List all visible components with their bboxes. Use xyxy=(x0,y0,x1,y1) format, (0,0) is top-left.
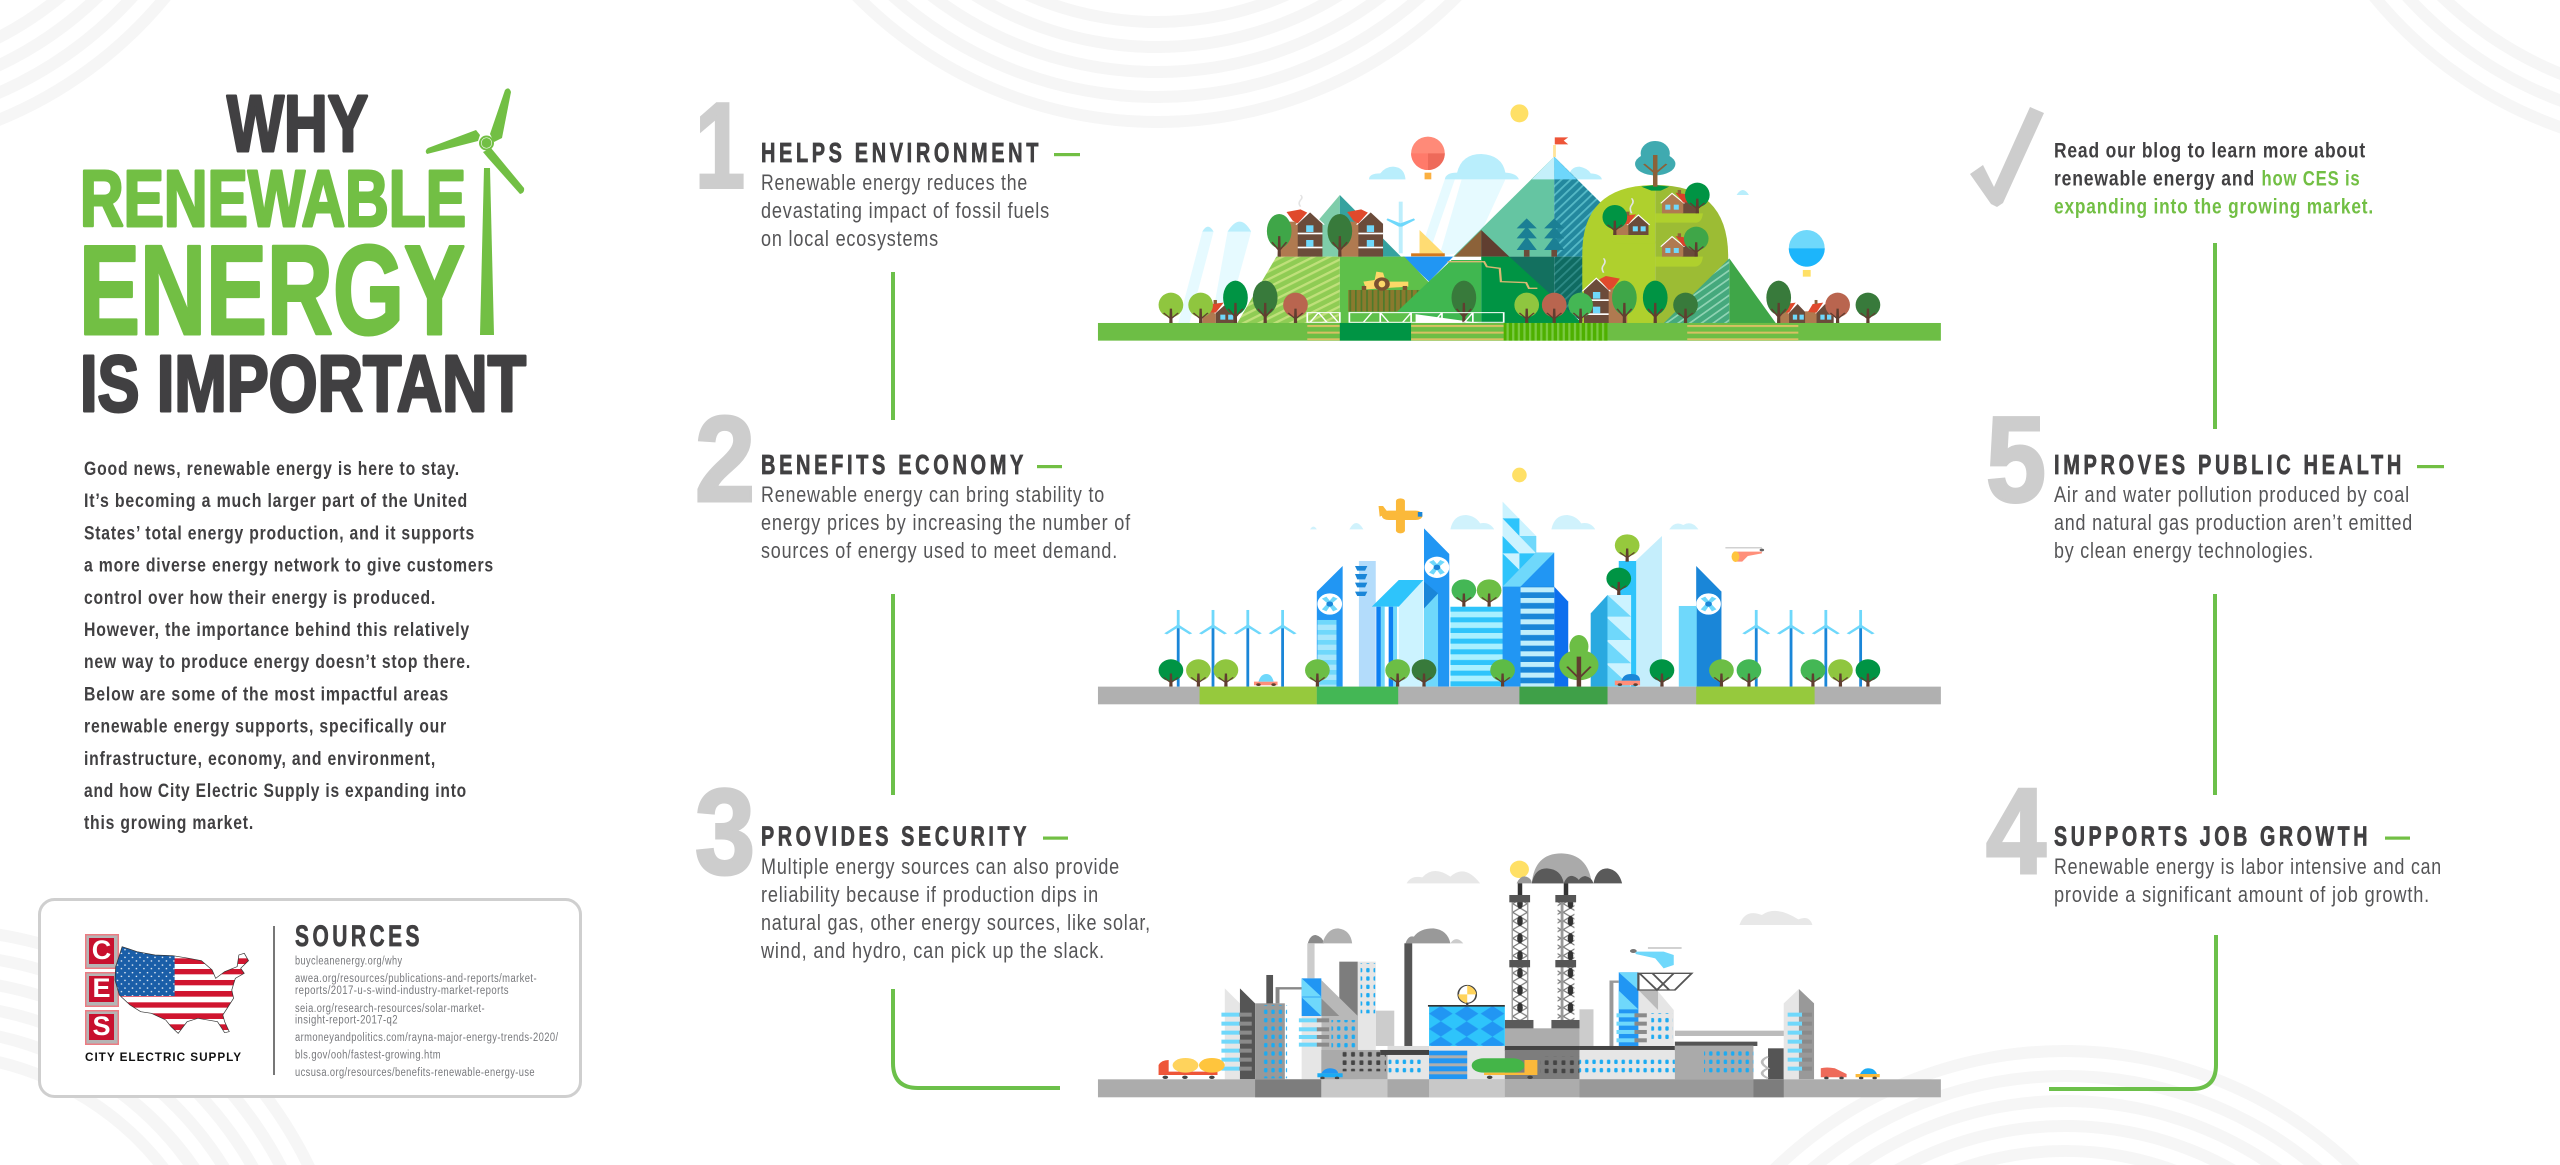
mid hill xyxy=(1397,260,1481,323)
item 2: benefits economy: energy prices by increasing the number of xyxy=(761,510,1131,535)
wind turbine and boat xyxy=(1386,202,1445,256)
red balloon xyxy=(1411,137,1445,179)
item 4: supports job growth: 4 xyxy=(1986,763,2046,899)
blue tiled building xyxy=(1380,985,1505,1079)
call to action text: Read our blog to learn more about xyxy=(2054,139,2366,162)
field and tractor xyxy=(1348,272,1422,323)
item 2: benefits economy: 2 xyxy=(695,391,755,527)
item 3: provides security: natural gas, other energy sources, like solar, xyxy=(761,910,1151,935)
heading: sources: SOURCES xyxy=(295,920,423,953)
brown peak xyxy=(1454,230,1481,257)
intro paragraph: a more diverse energy network to give customers xyxy=(84,555,494,577)
title: why: WHY xyxy=(227,79,368,168)
cars xyxy=(1254,674,1640,686)
trees xyxy=(1159,141,1880,323)
clouds xyxy=(1202,154,1749,232)
item 3: provides security: wind, and hydro, can pick up the slack. xyxy=(760,938,1105,963)
intro paragraph: and how City Electric Supply is expanding into xyxy=(84,780,467,802)
central mountain xyxy=(1453,137,1619,323)
blue balloon xyxy=(1789,230,1825,277)
intro paragraph: infrastructure, economy, and environment, xyxy=(84,748,436,770)
item 2: benefits economy: BENEFITS ECONOMY xyxy=(761,449,1027,480)
item 4: supports job growth xyxy=(1986,763,2442,907)
item 1: helps environment: Renewable energy reduces the xyxy=(761,170,1028,195)
source links xyxy=(295,956,559,1079)
plane xyxy=(1379,498,1422,533)
clouds xyxy=(1310,515,1698,529)
skyscrapers xyxy=(1317,502,1721,687)
item 1: helps environment: on local ecosystems xyxy=(761,226,939,251)
call to action text: renewable energy and xyxy=(2054,167,2255,190)
large right hill xyxy=(1582,185,1728,323)
icon: check mark xyxy=(1970,107,2044,207)
item 5: improves public health: and natural gas production aren’t emitted xyxy=(2054,510,2413,535)
source links: bls.gov/ooh/fastest-growing.htm xyxy=(295,1050,441,1062)
second factory xyxy=(1299,962,1394,1079)
item 4: supports job growth: Renewable energy is labor intensive and can xyxy=(2054,854,2442,879)
illustration: blue city xyxy=(1098,468,1941,704)
intro paragraph: It’s becoming a much larger part of the United xyxy=(84,490,468,512)
item 4: supports job growth: provide a significant amount of job growth. xyxy=(2054,882,2430,907)
logo: city electric supply: S xyxy=(92,1011,111,1041)
item 1: helps environment: devastating impact of fossil fuels xyxy=(761,198,1050,223)
connector arrows xyxy=(893,243,2216,1089)
title: is important: IS IMPORTANT xyxy=(80,339,526,428)
item 2: benefits economy: sources of energy used to meet demand. xyxy=(761,538,1118,563)
source links: buycleanenergy.org/why xyxy=(295,956,402,968)
title block xyxy=(79,79,526,428)
source links: awea.org/resources/publications-and-reports/market- xyxy=(295,973,537,985)
icon: usa flag map xyxy=(112,943,251,1037)
item 5: improves public health: 5 xyxy=(1986,392,2046,528)
item 2: benefits economy xyxy=(695,391,1131,563)
source links: reports/2017-u-s-wind-industry-market-reports xyxy=(295,985,509,997)
right tower xyxy=(1762,989,1814,1079)
intro paragraph xyxy=(84,458,494,834)
source links: ucsusa.org/resources/benefits-renewable-energy-use xyxy=(295,1067,535,1079)
source links: insight-report-2017-q2 xyxy=(295,1014,398,1026)
item 4: supports job growth: SUPPORTS JOB GROWTH xyxy=(2054,821,2371,852)
left hill xyxy=(1237,257,1340,323)
source links: armoneyandpolitics.com/rayna-major-energy-trends-2020/ xyxy=(295,1032,559,1044)
call to action text: how CES is xyxy=(2262,167,2360,190)
sun xyxy=(1510,104,1528,122)
intro paragraph: States’ total energy production, and it supports xyxy=(84,522,475,544)
houses xyxy=(1202,190,1835,323)
item 1: helps environment: 1 xyxy=(695,78,745,214)
item 3: provides security: reliability because if production dips in xyxy=(761,882,1099,907)
intro paragraph: new way to produce energy doesn’t stop there. xyxy=(84,651,471,673)
clouds and smoke xyxy=(1308,853,1812,943)
item 3: provides security: PROVIDES SECURITY xyxy=(761,821,1030,852)
ground xyxy=(1098,323,1941,341)
intro paragraph: renewable energy supports, specifically our xyxy=(84,716,447,738)
source links: seia.org/research-resources/solar-market- xyxy=(295,1003,485,1015)
ground xyxy=(1098,687,1941,704)
ground xyxy=(1098,1079,1941,1097)
item 2: benefits economy: Renewable energy can bring stability to xyxy=(761,482,1105,507)
intro paragraph: Good news, renewable energy is here to stay. xyxy=(84,458,460,480)
illustration: grey industry xyxy=(1098,853,1941,1097)
lattice towers xyxy=(1505,895,1593,1047)
item 3: provides security: 3 xyxy=(695,764,755,900)
chimney smoke xyxy=(1299,195,1633,273)
item 1: helps environment xyxy=(695,78,1080,251)
item 1: helps environment: HELPS ENVIRONMENT xyxy=(761,137,1042,168)
intro paragraph: this growing market. xyxy=(84,812,254,834)
call to action text xyxy=(2054,139,2374,218)
icon: wind turbine xyxy=(426,88,524,335)
right factory with crane xyxy=(1617,947,1692,1046)
sun xyxy=(1512,468,1527,482)
trees xyxy=(1159,534,1880,691)
right front hill xyxy=(1664,258,1729,323)
panel: sources xyxy=(40,900,580,1096)
item 5: improves public health: by clean energy technologies. xyxy=(2054,538,2314,563)
intro paragraph: Below are some of the most impactful areas xyxy=(84,683,449,705)
title: energy: ENERGY xyxy=(79,219,465,361)
item 5: improves public health xyxy=(1986,392,2444,563)
intro paragraph: control over how their energy is produced. xyxy=(84,587,436,609)
fence xyxy=(1307,313,1504,322)
title: renewable: RENEWABLE xyxy=(80,154,466,243)
intro paragraph: However, the importance behind this relatively xyxy=(84,619,470,641)
item 5: improves public health: IMPROVES PUBLIC HEALTH xyxy=(2054,449,2405,480)
logo: city electric supply: E xyxy=(92,973,111,1003)
item 3: provides security: Multiple energy sources can also provide xyxy=(761,854,1120,879)
call to action text: expanding into the growing market. xyxy=(2054,195,2374,218)
logo: city electric supply: C xyxy=(92,935,111,965)
logo: city electric supply: CITY ELECTRIC SUPPLY xyxy=(85,1050,242,1064)
turbines xyxy=(1164,610,1875,687)
light beams xyxy=(1178,179,1505,323)
illustration: green landscape xyxy=(1098,104,1941,341)
helicopter xyxy=(1725,547,1764,562)
item 3: provides security xyxy=(695,764,1151,963)
logo: city electric supply xyxy=(85,934,251,1064)
water xyxy=(1403,257,1453,282)
item 5: improves public health: Air and water pollution produced by coal xyxy=(2054,482,2410,507)
call to action xyxy=(1970,107,2374,218)
vehicles xyxy=(1159,1058,1880,1079)
central low building xyxy=(1505,1031,1784,1079)
rear mountain xyxy=(1316,195,1340,257)
stacks and pipes xyxy=(1266,883,1619,1047)
left tower xyxy=(1221,988,1287,1079)
